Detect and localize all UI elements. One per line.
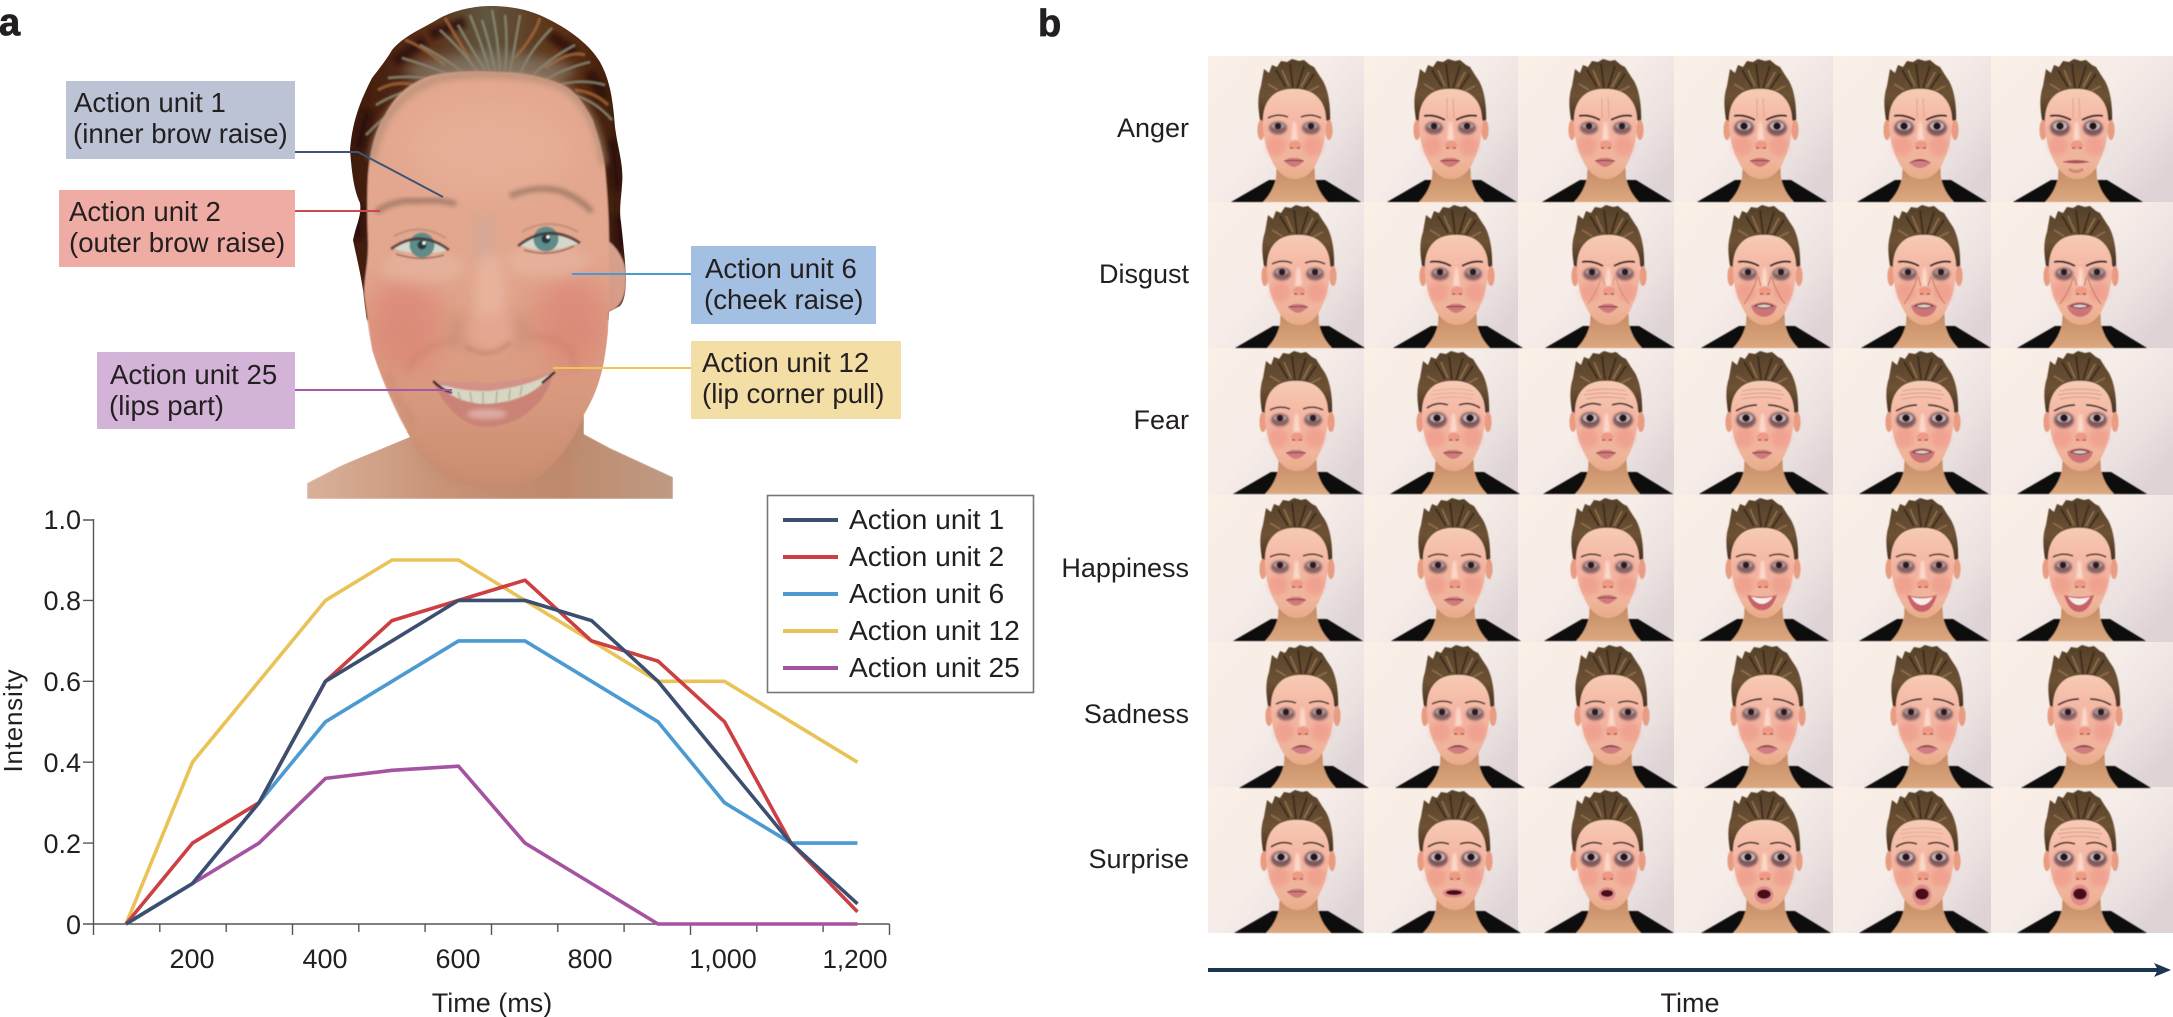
series: action unit 2 bbox=[126, 580, 858, 924]
panel label b: b bbox=[1038, 3, 1061, 45]
face: sadness 5 bbox=[1864, 645, 1994, 788]
face: happiness 4 bbox=[1699, 498, 1829, 641]
y axis labels: 0 bbox=[66, 910, 81, 940]
label: action unit 25: (lips part) bbox=[109, 390, 224, 421]
face: happiness 3 bbox=[1544, 498, 1674, 641]
label: action unit 1: Action unit 1 bbox=[74, 87, 226, 118]
chin shading bbox=[410, 420, 584, 490]
face photo with action unit locations bbox=[307, 0, 673, 499]
face: fear 5 bbox=[1859, 351, 1989, 494]
photo grid backgrounds bbox=[1208, 56, 2173, 933]
label: action unit 25 bbox=[97, 352, 295, 429]
label: action unit 2 bbox=[59, 190, 295, 267]
label: action unit 2: (outer brow raise) bbox=[69, 227, 285, 258]
emotion row labels: Anger bbox=[1117, 113, 1189, 143]
cheek blush bbox=[367, 277, 443, 373]
row: anger bbox=[1231, 59, 2143, 202]
face: anger 3 bbox=[1542, 59, 1672, 202]
face: fear 3 bbox=[1543, 351, 1673, 494]
face: anger 6 bbox=[2013, 59, 2143, 202]
smile lines bbox=[388, 335, 575, 424]
right eye bbox=[518, 224, 580, 253]
face: happiness 5 bbox=[1859, 498, 1989, 641]
face: disgust 6 bbox=[2017, 205, 2147, 348]
face: sadness 6 bbox=[2021, 645, 2151, 788]
y axis labels: 0.2 bbox=[43, 829, 81, 859]
face: anger 2 bbox=[1387, 59, 1517, 202]
chart legend: Action unit 25 bbox=[849, 651, 1020, 683]
leader line: action unit 25 bbox=[295, 389, 452, 391]
face: disgust 2 bbox=[1393, 205, 1523, 348]
leader line: action unit 1 bbox=[295, 152, 443, 197]
face: happiness 2 bbox=[1391, 498, 1521, 641]
face: disgust 1 bbox=[1235, 205, 1365, 348]
label: action unit 6 bbox=[691, 246, 876, 324]
photo grid of facial expressions over time bbox=[1231, 59, 2151, 933]
y axis labels bbox=[43, 505, 81, 940]
face: anger 5 bbox=[1857, 59, 1987, 202]
y axis labels: 0.4 bbox=[43, 748, 81, 778]
forehead highlight bbox=[410, 105, 570, 195]
face: surprise 3 bbox=[1544, 790, 1674, 933]
label: action unit 12: (lip corner pull) bbox=[702, 378, 884, 409]
face: fear 2 bbox=[1390, 351, 1520, 494]
row: happiness bbox=[1233, 498, 2146, 641]
chart legend: Action unit 12 bbox=[849, 614, 1020, 646]
leader line: action unit 2 bbox=[295, 210, 380, 212]
y axis labels: 0.6 bbox=[43, 667, 81, 697]
axes and ticks bbox=[83, 519, 890, 935]
hairline softening bbox=[372, 74, 604, 165]
label: action unit 6: (cheek raise) bbox=[704, 284, 864, 315]
x axis labels: 1,000 bbox=[689, 944, 757, 974]
emotion row labels: Disgust bbox=[1099, 259, 1189, 289]
nose bbox=[452, 220, 528, 356]
series: action unit 12 bbox=[126, 560, 858, 924]
skin bbox=[364, 71, 609, 490]
face: sadness 2 bbox=[1395, 645, 1525, 788]
label: action unit 12: Action unit 12 bbox=[702, 347, 869, 378]
left eye bbox=[391, 229, 449, 258]
chart legend: Action unit 6 bbox=[849, 577, 1004, 609]
hair bbox=[345, 0, 630, 320]
mouth with teeth bbox=[431, 371, 555, 427]
emotion row labels: Surprise bbox=[1088, 844, 1189, 874]
row: disgust bbox=[1235, 205, 2147, 348]
label: action unit 25: Action unit 25 bbox=[110, 359, 277, 390]
face: disgust 3 bbox=[1545, 205, 1675, 348]
emotion row labels bbox=[1061, 113, 1189, 874]
left eyebrow bbox=[376, 200, 456, 212]
face: surprise 6 bbox=[2017, 790, 2147, 933]
neck and shoulders bbox=[307, 415, 673, 499]
y axis labels: 1.0 bbox=[43, 505, 81, 535]
ear bbox=[607, 240, 626, 312]
leader line: action unit 6 bbox=[572, 273, 691, 275]
face: sadness 1 bbox=[1239, 645, 1369, 788]
face: surprise 5 bbox=[1859, 790, 1989, 933]
time arrow bbox=[1208, 963, 2171, 977]
line chart: action unit intensity over time bbox=[0, 505, 890, 1017]
label: action unit 6: Action unit 6 bbox=[705, 253, 857, 284]
leader line: action unit 12 bbox=[553, 367, 691, 369]
face: fear 4 bbox=[1699, 351, 1829, 494]
face: fear 6 bbox=[2017, 351, 2147, 494]
right eyebrow bbox=[510, 189, 592, 212]
face: surprise 2 bbox=[1391, 790, 1521, 933]
x axis labels: 1,200 bbox=[822, 944, 888, 974]
face: happiness 1 bbox=[1233, 498, 1363, 641]
y axis labels: 0.8 bbox=[43, 586, 81, 616]
label: action unit 12 bbox=[691, 341, 901, 419]
chart legend: Action unit 2 bbox=[849, 540, 1004, 572]
chart legend: Action unit 1 bbox=[849, 503, 1004, 535]
face: sadness 3 bbox=[1548, 645, 1678, 788]
face: anger 1 bbox=[1231, 59, 1361, 202]
x axis labels: 200 bbox=[169, 944, 215, 974]
x axis labels bbox=[169, 944, 888, 974]
face: surprise 4 bbox=[1701, 790, 1831, 933]
x axis labels: 600 bbox=[435, 944, 481, 974]
label: action unit 1 bbox=[66, 81, 295, 159]
face: anger 4 bbox=[1697, 59, 1827, 202]
face: surprise 1 bbox=[1234, 790, 1364, 933]
label: action unit 1: (inner brow raise) bbox=[73, 118, 288, 149]
x axis labels: 800 bbox=[567, 944, 613, 974]
emotion row labels: Happiness bbox=[1061, 553, 1189, 583]
face: happiness 6 bbox=[2016, 498, 2146, 641]
face: disgust 5 bbox=[1861, 205, 1991, 348]
row: surprise bbox=[1234, 790, 2147, 933]
emotion row labels: Fear bbox=[1133, 405, 1189, 435]
row: fear bbox=[1233, 351, 2147, 494]
face: fear 1 bbox=[1233, 351, 1363, 494]
row: sadness bbox=[1239, 645, 2151, 788]
series: action unit 6 bbox=[126, 641, 858, 924]
x axis labels: 400 bbox=[302, 944, 348, 974]
face: sadness 4 bbox=[1704, 645, 1834, 788]
chart legend bbox=[768, 496, 1034, 692]
eye area bbox=[383, 254, 460, 286]
face: disgust 4 bbox=[1701, 205, 1831, 348]
series: action unit 25 bbox=[126, 766, 858, 924]
series: action unit 1 bbox=[126, 600, 858, 924]
label: action unit 2: Action unit 2 bbox=[69, 196, 221, 227]
emotion row labels: Sadness bbox=[1084, 699, 1189, 729]
